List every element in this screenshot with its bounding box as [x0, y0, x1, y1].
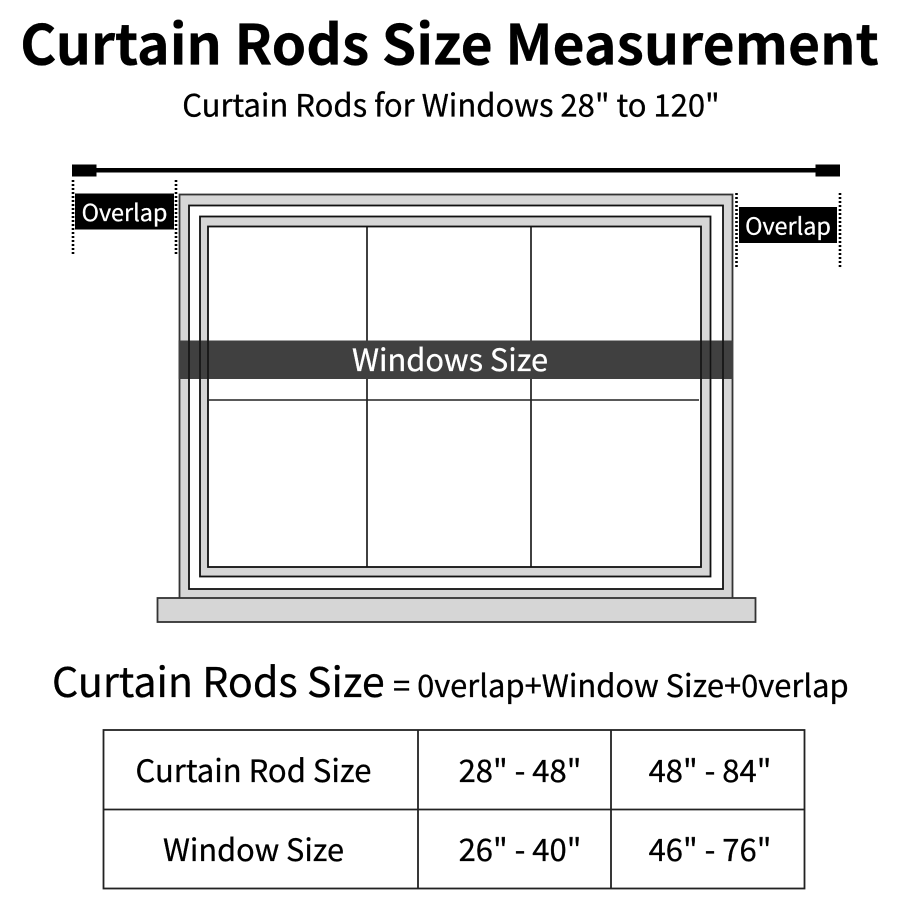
window frame [180, 194, 732, 598]
size table: 46" - 76" [649, 825, 771, 870]
formula: Curtain Rods Size [52, 649, 385, 709]
curtain rod [72, 164, 840, 176]
title: Curtain Rods Size Measurement [20, 0, 879, 80]
size table [104, 730, 804, 888]
overlap marker: right: Overlap [745, 208, 831, 242]
size table: 28" - 48" [459, 746, 581, 791]
overlap marker: left: Overlap [82, 194, 167, 228]
overlap marker: right [736, 193, 840, 268]
windows size band [178, 335, 733, 380]
size table: 48" - 84" [649, 746, 771, 791]
size table: Curtain Rod Size [136, 746, 371, 791]
size table: 26" - 40" [459, 825, 581, 870]
window sill [158, 598, 756, 622]
formula: = 0verlap+Window Size+0verlap [393, 661, 849, 706]
overlap marker: left [73, 180, 176, 255]
size table: Window Size [163, 825, 344, 870]
subtitle: Curtain Rods for Windows 28" to 120" [182, 80, 720, 125]
formula [52, 649, 849, 709]
windows size band: Windows Size [352, 335, 548, 380]
